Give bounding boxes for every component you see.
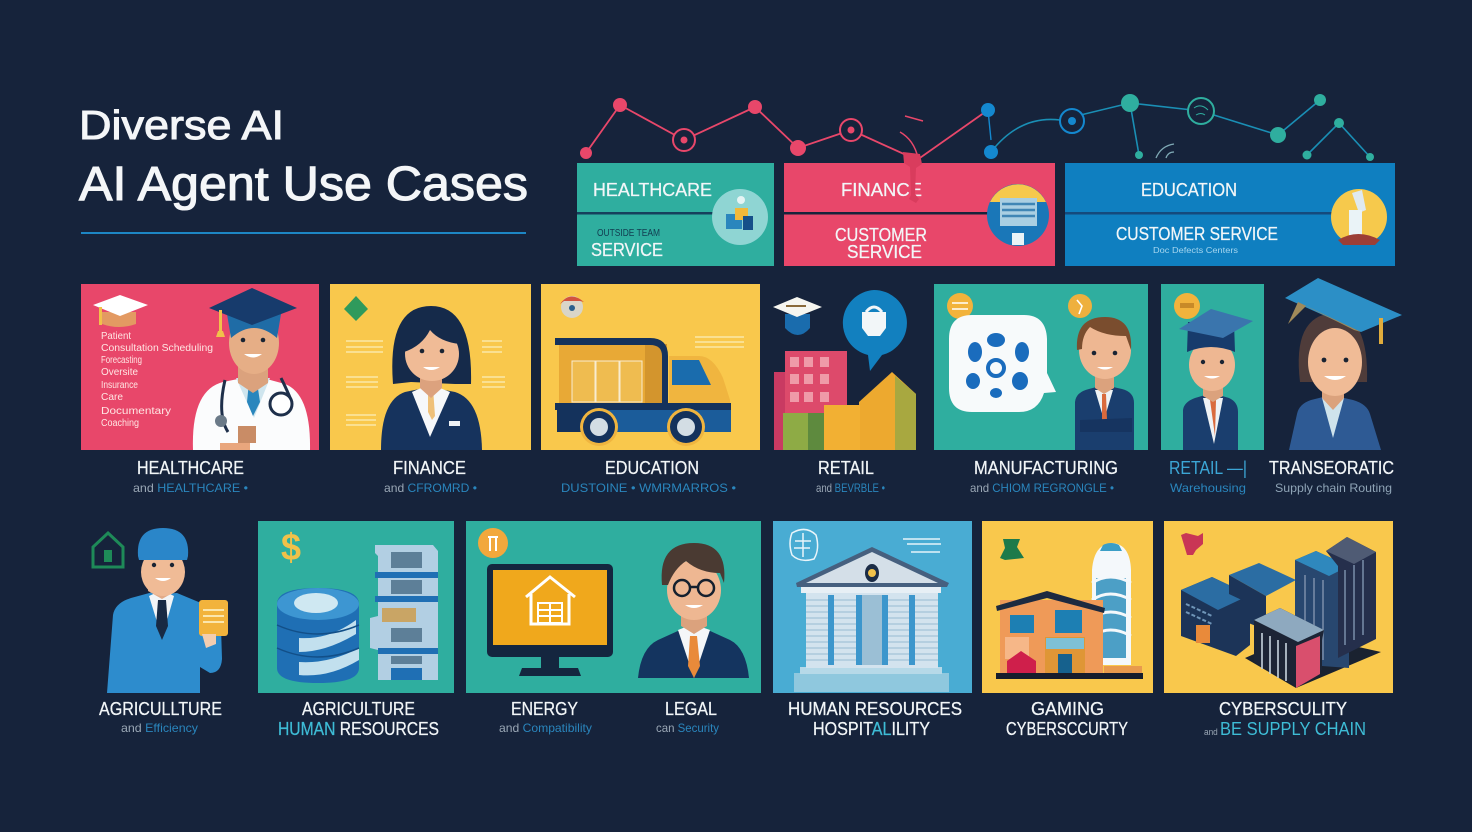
icon: orange coin	[1068, 294, 1092, 318]
text block: healthcare list: Patient	[101, 331, 131, 342]
row 2 labels	[99, 699, 1366, 739]
person: graduate man	[1179, 309, 1253, 450]
label: agriculture and human resources	[278, 699, 439, 739]
person: transportation woman with cap	[1285, 278, 1402, 450]
text block: healthcare list: Oversite	[101, 367, 138, 378]
title: Diverse AI	[79, 102, 284, 148]
panel: top teal banner	[577, 163, 774, 266]
icon: database cylinder	[277, 588, 359, 683]
label: human resources	[788, 699, 962, 739]
label: retail: and BEVRBLE •	[816, 481, 885, 495]
label: gaming: GAMING	[1031, 699, 1104, 719]
person: man with arms crossed	[1075, 317, 1134, 450]
icon: brain outline	[790, 529, 818, 560]
icon: yellow coin	[947, 293, 973, 319]
label: agriculture and human resources: HUMAN RESOURCES	[278, 719, 439, 739]
label: retail: RETAIL	[818, 458, 874, 478]
icon: red pin over heading	[903, 152, 922, 203]
label: retail second: Warehousing	[1170, 481, 1246, 495]
label: transportation: TRANSEORATIC	[1269, 458, 1394, 478]
panel: top teal banner: SERVICE	[591, 240, 663, 260]
label: human resources: HUMAN RESOURCES	[788, 699, 962, 719]
label: education: DUSTOINE • WMRMARROS •	[561, 481, 736, 495]
label: gaming: CYBERSCCURTY	[1006, 719, 1128, 739]
panel: top blue banner: CUSTOMER SERVICE	[1116, 224, 1278, 244]
panel: retail illustration	[773, 290, 916, 450]
panel: top red banner: CUSTOMER	[835, 225, 927, 245]
decorative text lines	[903, 539, 941, 552]
icon: healthcare circle	[712, 189, 768, 245]
person: businesswoman	[381, 306, 482, 450]
label: legal: LEGAL	[665, 699, 717, 719]
icon: orange coin	[478, 528, 508, 558]
decorative text lines	[695, 337, 744, 347]
label: energy: ENERGY	[511, 699, 578, 719]
label: education	[561, 458, 736, 495]
text block: healthcare list: Coaching	[101, 418, 139, 429]
icon: dollar sign: $	[281, 527, 301, 569]
title	[79, 102, 528, 234]
label: finance: and CFROMRD •	[384, 481, 477, 495]
label: healthcare: and HEALTHCARE •	[133, 481, 248, 495]
label: retail	[816, 458, 885, 495]
label: cybersecurity	[1204, 699, 1366, 739]
label: agriculture and human resources: AGRICULTURE	[302, 699, 415, 719]
icon: server stack	[370, 545, 438, 680]
label: legal	[656, 699, 719, 735]
panel: manufacturing	[934, 284, 1148, 450]
panel: top blue banner: EDUCATION	[1141, 180, 1237, 200]
panel: finance	[330, 284, 531, 450]
label: education: EDUCATION	[605, 458, 699, 478]
text block: healthcare list: Documentary	[101, 406, 171, 417]
icon: classical bank	[794, 547, 949, 692]
person: man with glasses	[638, 543, 749, 678]
panel: healthcare	[81, 284, 319, 450]
label: legal: can Security	[656, 721, 719, 735]
icon: house	[996, 591, 1143, 679]
panel: top teal banner: HEALTHCARE	[593, 180, 712, 200]
icon: isometric data centre	[1181, 537, 1381, 688]
panel: education truck	[541, 284, 760, 450]
panel: top red banner	[784, 152, 1055, 266]
label: energy: and Compatibility	[499, 721, 592, 735]
icon: white graduation cap	[93, 295, 148, 327]
text block: healthcare list	[101, 331, 213, 429]
icon: education circle	[1331, 189, 1387, 245]
panel: bank building	[773, 521, 972, 693]
text block: healthcare list: Care	[101, 392, 123, 403]
icon: green house	[93, 533, 123, 567]
icon: green mascot	[1000, 539, 1024, 560]
icon: glass tower	[1092, 543, 1131, 665]
label: manufacturing	[970, 458, 1118, 495]
person: doctor with cap	[193, 288, 310, 450]
panel: retail portrait with cap	[1161, 284, 1264, 450]
icon: buildings	[774, 351, 916, 450]
panel: data storage	[258, 521, 454, 693]
panel: cyber security	[1164, 521, 1393, 693]
icon: delivery truck	[555, 338, 731, 446]
label: manufacturing: MANUFACTURING	[974, 458, 1118, 478]
text block: healthcare list: Forecasting	[101, 355, 142, 366]
label: agriculture: and Efficiency	[121, 721, 198, 735]
icon: green diamond	[344, 296, 368, 321]
label: finance: FINANCE	[393, 458, 466, 478]
text block: healthcare list: Consultation Scheduling	[101, 343, 213, 354]
person: agriculture worker	[93, 528, 228, 693]
label: human resources: HOSPITALILITY	[813, 719, 930, 739]
panel: top teal banner: OUTSIDE TEAM	[597, 228, 660, 239]
icon: blue speech bubble	[843, 290, 907, 371]
panel: energy and legal	[466, 521, 761, 693]
network diagram: connected nodes	[580, 94, 1374, 161]
label: healthcare: HEALTHCARE	[137, 458, 244, 478]
text block: healthcare list: Insurance	[101, 380, 138, 391]
label: retail second: RETAIL —|	[1169, 458, 1247, 478]
icon: finance building circle	[987, 184, 1049, 246]
label: gaming	[1006, 699, 1128, 739]
label: healthcare	[133, 458, 248, 495]
icon: small red mascot	[560, 296, 584, 318]
label: energy	[499, 699, 592, 735]
decorative text lines	[346, 341, 505, 425]
icon: yellow coin	[1174, 293, 1200, 319]
panel: top red banner: FINANCE	[841, 180, 922, 200]
icon: speech bubble with gears	[949, 315, 1056, 412]
icon: red mascot	[1181, 533, 1203, 555]
panel: top red banner: SERVICE	[847, 242, 922, 262]
label: transportation	[1269, 458, 1394, 495]
label: agriculture	[99, 699, 222, 735]
label: retail second	[1169, 458, 1247, 495]
label: agriculture: AGRICULLTURE	[99, 699, 222, 719]
icon: monitor with warehouse	[487, 564, 613, 676]
panel: top blue banner: Doc Defects Centers	[1153, 246, 1238, 255]
icon: cap and blue shield	[773, 297, 822, 335]
label: transportation: Supply chain Routing	[1275, 481, 1392, 495]
label: manufacturing: and CHIOM REGRONGLE •	[970, 481, 1114, 495]
label: cybersecurity: and BE SUPPLY CHAIN	[1204, 719, 1366, 739]
panel: top blue banner	[1065, 163, 1395, 266]
row 1 labels	[133, 458, 1394, 495]
panel: gaming	[982, 521, 1153, 693]
label: finance	[384, 458, 477, 495]
label: cybersecurity: CYBERSCULITY	[1219, 699, 1347, 719]
title: AI Agent Use Cases	[79, 158, 528, 211]
